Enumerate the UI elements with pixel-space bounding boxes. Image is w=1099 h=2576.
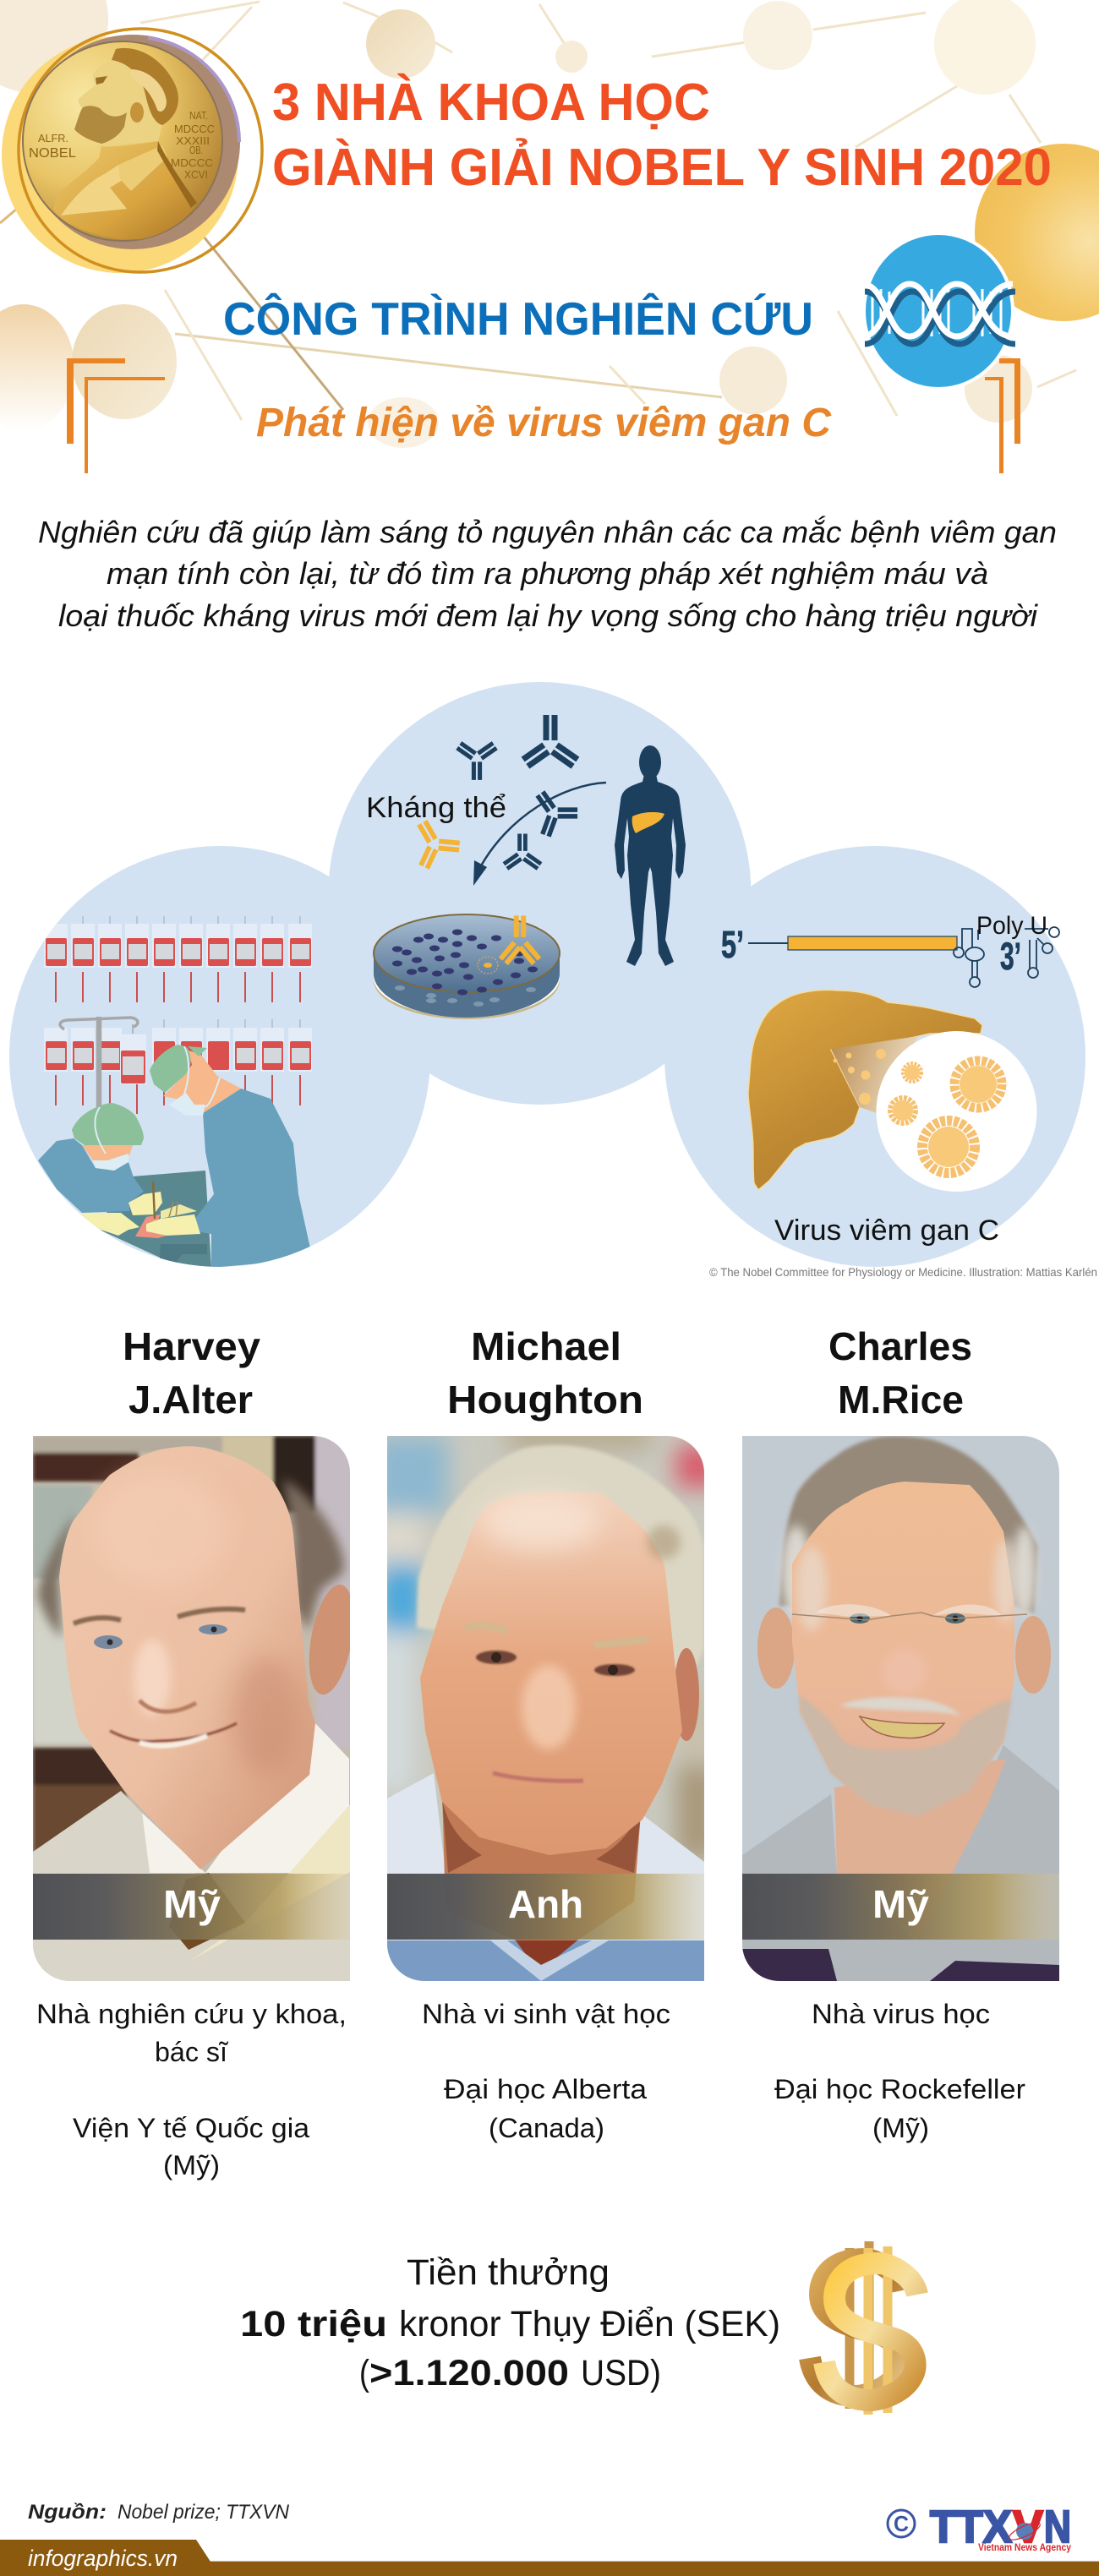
column 2 description: Nhà vi sinh vật học [422, 1999, 670, 2029]
glasses [792, 1604, 1027, 1620]
icon: gold dollar sign [810, 2241, 917, 2415]
subtitle: hepatitis C discovery: Phát hiện về virus viêm gan C [256, 401, 832, 445]
intro paragraph: mạn tính còn lại, từ đó tìm ra phương pháp xét nghiệm máu và [107, 556, 988, 591]
operating table [96, 1171, 211, 1268]
panel: illustration circles [9, 682, 1085, 1267]
column 1 description: (Mỹ) [163, 2150, 220, 2180]
icon: Nobel medal [2, 29, 262, 273]
panel: blood transfusion surgery [38, 916, 312, 1268]
nationality band: UK [387, 1874, 704, 1940]
portrait: Harvey J. Alter [33, 1436, 361, 1981]
column 2 name: Michael [471, 1324, 621, 1368]
medal inscriptions: MDCCC [171, 156, 213, 169]
column 2 description [422, 1999, 670, 2143]
column 1 description: bác sĩ [155, 2037, 229, 2067]
background: gold molecule pattern [0, 0, 1099, 448]
label: hepatitis C virus: Virus viêm gan C [774, 1214, 999, 1247]
column 3 name: M.Rice [838, 1378, 964, 1422]
medal inscriptions [29, 109, 215, 181]
footer bar: infographics.vn [28, 2546, 178, 2571]
heading: research work: CÔNG TRÌNH NGHIÊN CỨU [223, 292, 813, 345]
column 3 description: Đại học Rockefeller [774, 2074, 1025, 2104]
column 2 name [447, 1324, 643, 1422]
diagram: virus RNA genome: 3’ [1000, 935, 1021, 978]
medal inscriptions: NOBEL [29, 146, 76, 161]
portrait: Charles M. Rice [742, 1436, 1059, 1981]
column 2 description: Đại học Alberta [444, 2074, 647, 2104]
column 1 description: Viện Y tế Quốc gia [73, 2113, 309, 2143]
title [272, 74, 1052, 197]
illustration: liver with virus [748, 990, 1036, 1192]
logo: TTXVN [888, 2502, 1072, 2553]
logo: TTXVN: TTX [930, 2502, 1012, 2552]
column 2 name: Houghton [447, 1378, 643, 1422]
icon: human body with liver [615, 745, 686, 966]
nationality band: USA [742, 1874, 1059, 1940]
column 3 description: (Mỹ) [872, 2113, 929, 2143]
nationality band: USA: Mỹ [163, 1882, 221, 1926]
illustration credit: © The Nobel Committee for Physiology or Medicine. Illustration: Mattias Karlén [709, 1266, 1097, 1279]
column 1 name: J.Alter [128, 1378, 253, 1422]
column 1 description [36, 1999, 347, 2180]
prize money text: kronor Thụy Điển (SEK) [399, 2304, 780, 2344]
nationality band: USA: Mỹ [872, 1882, 929, 1926]
column 3 name [828, 1324, 972, 1422]
logo: TTXVN: V [1013, 2502, 1043, 2552]
medal inscriptions: OB. [189, 144, 203, 156]
antibodies [402, 715, 581, 870]
label: antibody: Kháng thể [366, 792, 506, 824]
logo: TTXVN: Vietnam News Agency [978, 2543, 1072, 2553]
nationality band: USA [33, 1874, 350, 1940]
medal coat [53, 141, 197, 239]
icon: DNA helix [862, 233, 1015, 389]
title: 3 NHÀ KHOA HỌC [272, 74, 710, 132]
medal inscriptions: MDCCC [174, 123, 215, 135]
virus particles [834, 1049, 997, 1167]
logo: TTXVN: C [894, 2511, 909, 2536]
prize money text [240, 2252, 780, 2393]
column 1 name [123, 1324, 260, 1422]
footer bar [0, 2540, 1099, 2576]
dish cells [392, 930, 538, 996]
medal inscriptions: XXXIII [176, 134, 210, 147]
prize money text: 10 triệu [240, 2304, 387, 2344]
intro paragraph [38, 515, 1057, 633]
medal inscriptions: NAT. [189, 109, 208, 122]
logo: TTXVN: N [1044, 2502, 1071, 2552]
nationality band: UK: Anh [508, 1882, 583, 1926]
intro paragraph: Nghiên cứu đã giúp làm sáng tỏ nguyên nhân các ca mắc bệnh viêm gan [38, 515, 1057, 549]
prize money text: >1.120.000 [369, 2353, 569, 2393]
standing surgeon [146, 1045, 310, 1268]
column 1 description: Nhà nghiên cứu y khoa, [36, 1999, 347, 2029]
icon: corner brackets [67, 358, 1020, 473]
liver [632, 812, 664, 833]
column 3 description: Nhà virus học [812, 1999, 990, 2029]
diagram: virus RNA genome [721, 912, 1059, 987]
seated surgeon [38, 1103, 197, 1238]
blood bags [44, 916, 312, 1114]
column 3 name: Charles [828, 1324, 972, 1368]
source [28, 2501, 290, 2524]
diagram: virus RNA genome: Poly U [976, 912, 1047, 940]
column 1 name: Harvey [123, 1324, 260, 1368]
medal head [78, 63, 162, 145]
IV stand [60, 1017, 146, 1109]
portrait: Michael Houghton [387, 1436, 704, 1981]
title: GIÀNH GIẢI NOBEL Y SINH 2020 [272, 139, 1052, 197]
medal inscriptions: XCVI [184, 168, 208, 181]
source: Nguồn: [28, 2501, 107, 2524]
prize money text: Tiền thưởng [407, 2252, 610, 2293]
intro paragraph: loại thuốc kháng virus mới đem lại hy vọng sống cho hàng triệu người [58, 598, 1038, 633]
medal inscriptions: ALFR. [38, 132, 68, 145]
icon: petri dish [374, 914, 560, 1019]
arrow: antibody sampling [473, 783, 606, 886]
column 2 description: (Canada) [489, 2113, 604, 2143]
source: Nobel prize; TTXVN [118, 2501, 290, 2524]
prize money text: USD) [581, 2353, 661, 2393]
prize money text: ( [359, 2353, 370, 2393]
column 3 description [774, 1999, 1025, 2143]
diagram: virus RNA genome: 5’ [721, 923, 744, 966]
